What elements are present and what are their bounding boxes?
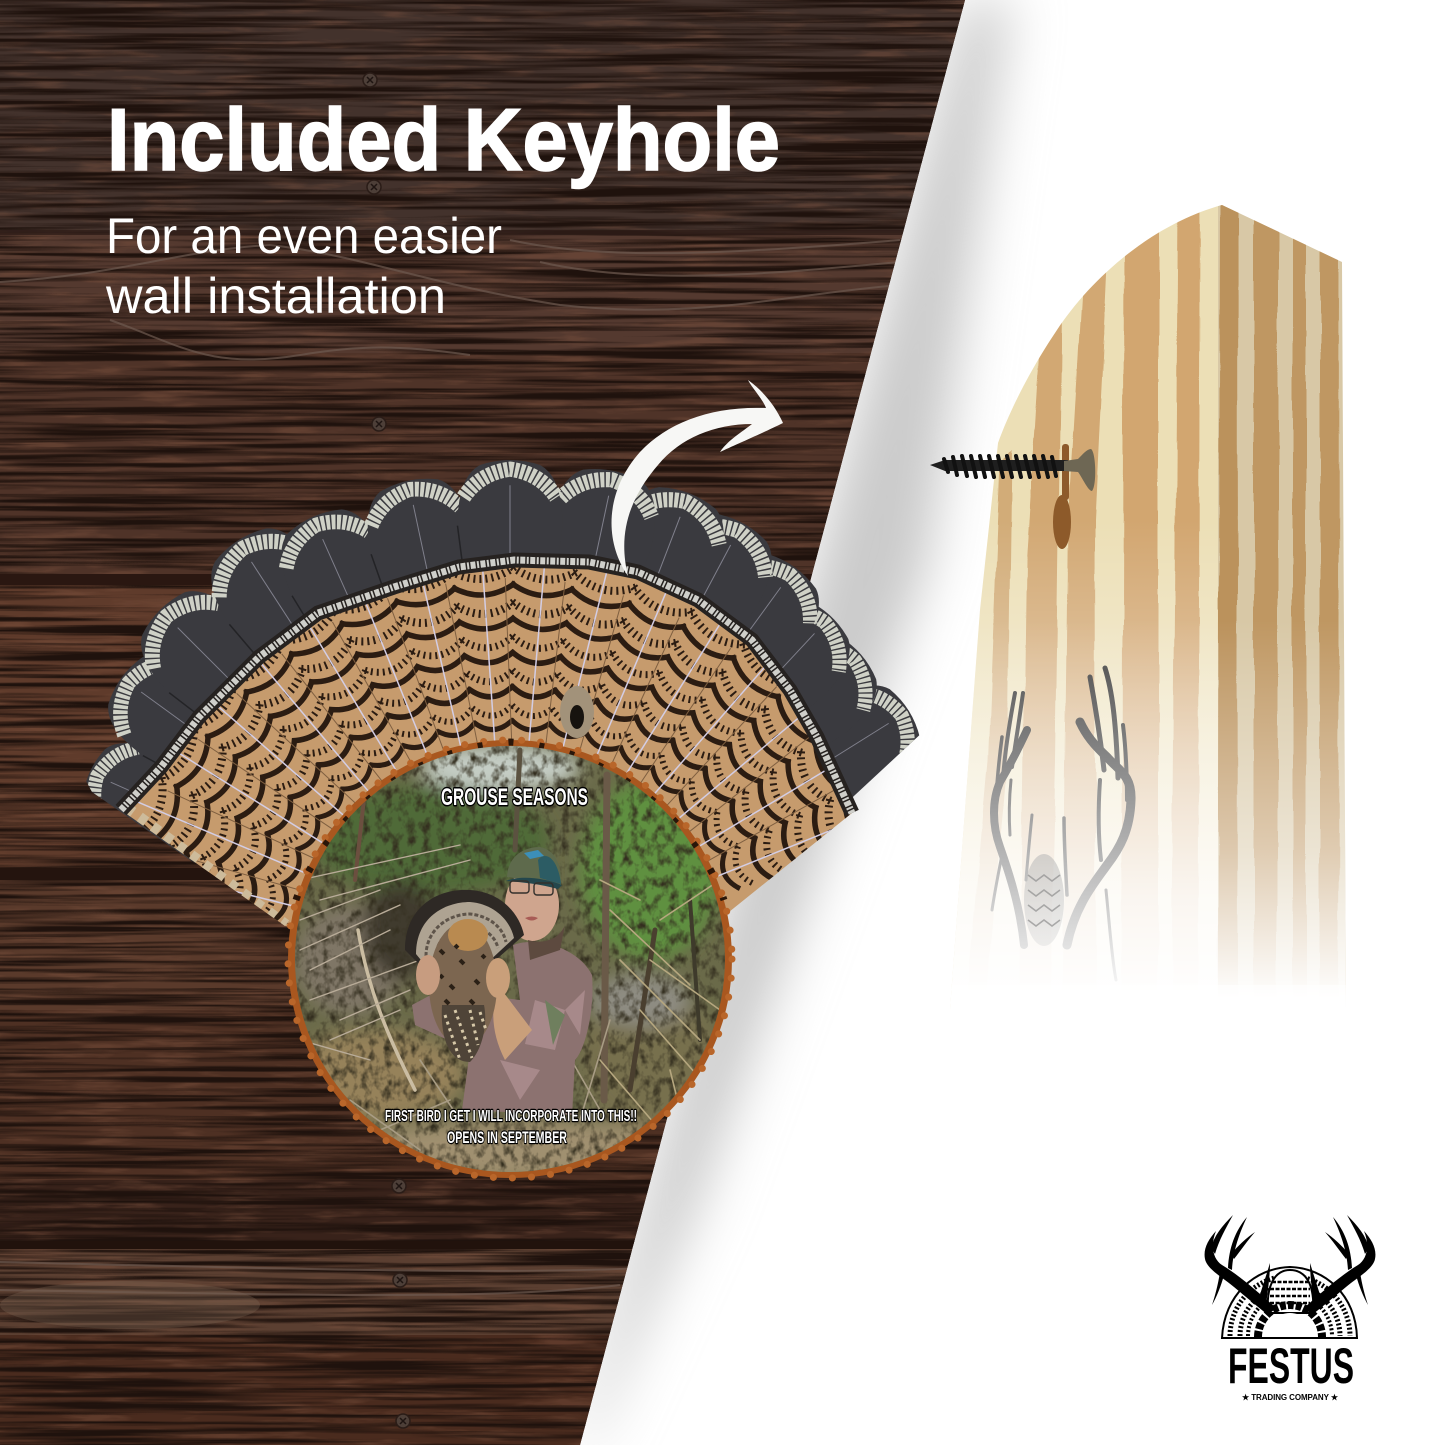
paper curl shadow <box>580 0 1010 1445</box>
photo captions <box>385 784 637 1147</box>
logo fan <box>1222 1267 1357 1338</box>
watermark logo on board <box>992 668 1131 980</box>
wood slice photo disc <box>280 730 740 1190</box>
subtitle: For an even easier <box>106 208 502 264</box>
curved arrow <box>612 380 783 576</box>
hunter <box>412 847 593 1115</box>
logo wordmark: FESTUS <box>1228 1338 1354 1394</box>
wooden board with keyhole <box>940 195 1360 1025</box>
photo captions: GROUSE SEASONS <box>441 784 588 811</box>
keyhole slot <box>1053 444 1071 549</box>
tan barred feather bases <box>121 568 852 926</box>
feather spot <box>560 686 594 738</box>
screw <box>930 449 1095 491</box>
turkey feather fan <box>70 460 935 960</box>
logo antlers <box>1205 1215 1375 1315</box>
Festus logo <box>1205 1215 1375 1402</box>
photo captions: FIRST BIRD I GET I WILL INCORPORATE INTO THIS!! <box>385 1108 637 1125</box>
grouse <box>405 890 524 1062</box>
logo tagline: ★ TRADING COMPANY ★ <box>1242 1393 1339 1402</box>
title: Included Keyhole <box>107 90 780 189</box>
photo captions: OPENS IN SEPTEMBER <box>447 1128 567 1147</box>
subtitle <box>105 208 502 324</box>
feather white band <box>121 560 852 813</box>
photo of hunter with grouse <box>295 746 725 1172</box>
subtitle: wall installation <box>105 268 446 324</box>
wood plank background <box>0 0 965 1445</box>
